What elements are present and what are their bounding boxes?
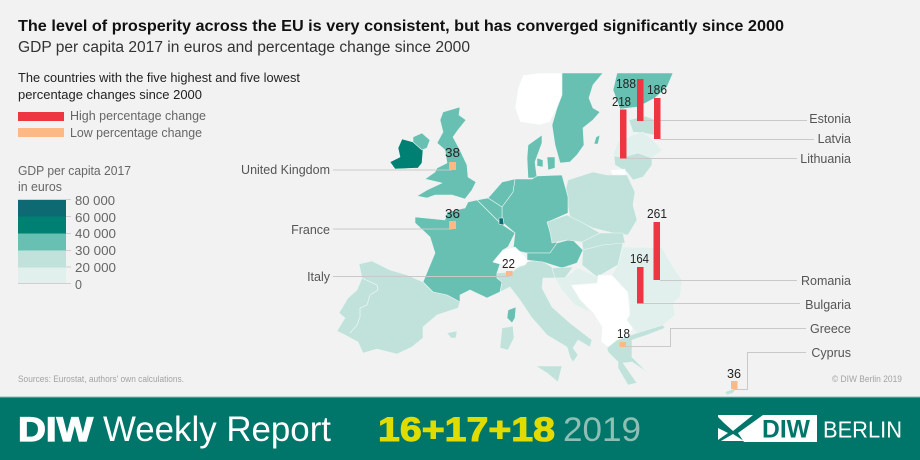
bar values: 186 [647,83,667,97]
Austria [527,239,583,268]
footer: year: 2019 [563,411,641,449]
country labels: Lithuania [800,152,851,166]
low swatch [18,128,64,137]
low label: Low percentage change [70,126,202,140]
footer: DIW: DIW [18,411,94,449]
scale labels: 80 000 [75,194,115,208]
Slovenia [552,267,573,278]
source note: Sources: Eurostat, authors' own calculations. [18,374,184,384]
bar values: 188 [616,77,636,91]
legend heading: percentage changes since 2000 [18,88,202,102]
high label: High percentage change [70,109,206,123]
Great Britain [417,107,476,199]
title: The level of prosperity across the EU is very consistent, but has converged significantly since 2000 [18,18,784,35]
country labels: Estonia [809,112,851,126]
country labels: Romania [801,274,851,288]
Sweden [552,73,603,163]
Danish island: Funen [537,158,543,167]
bar values: 18 [617,327,630,341]
colour ramp [18,200,71,284]
Ireland [390,139,423,169]
Finland [613,73,673,109]
bar: Cyprus [731,381,738,389]
Germany [502,175,568,253]
Bulgaria [627,303,675,333]
Luxembourg [499,218,504,225]
logo: DIW Berlin [718,415,902,444]
footer: Weekly Report: Weekly Report [103,410,331,449]
Northern Ireland [413,133,430,150]
Netherlands [488,179,515,207]
bar values: 38 [445,146,460,160]
Portugal border [350,278,378,333]
bar values: 218 [612,95,631,109]
Belgium [477,198,502,223]
logo: DIW Berlin: BERLIN [823,416,902,442]
footer band [0,396,920,460]
bar: United Kingdom [449,162,456,170]
legend: percentage change [18,71,301,140]
Hungary [582,243,623,277]
bar values: 22 [502,257,515,271]
scale labels: 0 [75,278,82,292]
bar: Lithuania [620,110,626,158]
legend heading: The countries with the five highest and five lowest [18,71,301,85]
logo: DIW Berlin: DIW [762,416,810,444]
footer: issue number: 16+17+18 [378,411,555,449]
Czech Republic [547,215,600,243]
France [415,200,515,302]
Poland [565,172,637,235]
Cyprus [725,387,738,395]
high swatch [18,112,64,121]
Gotland [594,135,600,144]
low percentage change bars [449,162,738,389]
country labels: Latvia [818,132,851,146]
country labels: Italy [307,270,331,284]
Switzerland [493,247,529,268]
Romania [612,247,682,303]
Norway [515,73,563,125]
Corsica [507,307,516,323]
scale labels: 30 000 [75,244,116,258]
Western Balkans [571,275,633,347]
Sardinia [500,326,514,350]
copyright: © DIW Berlin 2019 [832,374,902,384]
Balearic islands [447,331,457,338]
bar values [445,77,741,381]
Lithuania [614,153,652,180]
country labels: Cyprus [811,346,851,360]
bar: Greece [620,342,626,347]
Italy [497,260,592,362]
country labels: United Kingdom [241,163,330,177]
bar values: 36 [727,367,741,381]
Kaliningrad [610,169,627,176]
Latvia [613,132,662,158]
map of Europe [337,73,738,395]
Estonia [629,116,658,135]
bar: France [449,221,456,229]
scale labels: 40 000 [75,227,116,241]
legend: GDP per capita scale [18,164,131,292]
Sicily [536,366,562,382]
bar: Bulgaria [637,267,644,304]
bar: Estonia [637,79,644,121]
bar: Romania [654,222,660,280]
Denmark [527,135,542,178]
scale labels [75,194,116,292]
country labels: France [291,223,330,237]
Slovakia [582,233,625,250]
leader lines [333,120,814,390]
scale heading: GDP per capita 2017 [18,164,131,178]
scale heading: in euros [18,180,62,194]
Danish island: Zealand [547,157,555,170]
Croatia [555,268,600,312]
bar values: 164 [630,252,649,266]
subtitle: GDP per capita 2017 in euros and percentage change since 2000 [18,39,470,56]
country labels [241,112,851,360]
scale labels: 60 000 [75,211,116,225]
Spain and Portugal [337,261,460,354]
high percentage change bars [620,79,660,304]
scale labels: 20 000 [75,261,116,275]
bar values: 261 [647,207,667,221]
bar: Italy [506,271,512,276]
Greece [607,325,665,385]
bar: Latvia [654,98,660,139]
country labels: Bulgaria [805,298,851,312]
country labels: Greece [810,322,851,336]
bar values: 36 [445,207,460,221]
